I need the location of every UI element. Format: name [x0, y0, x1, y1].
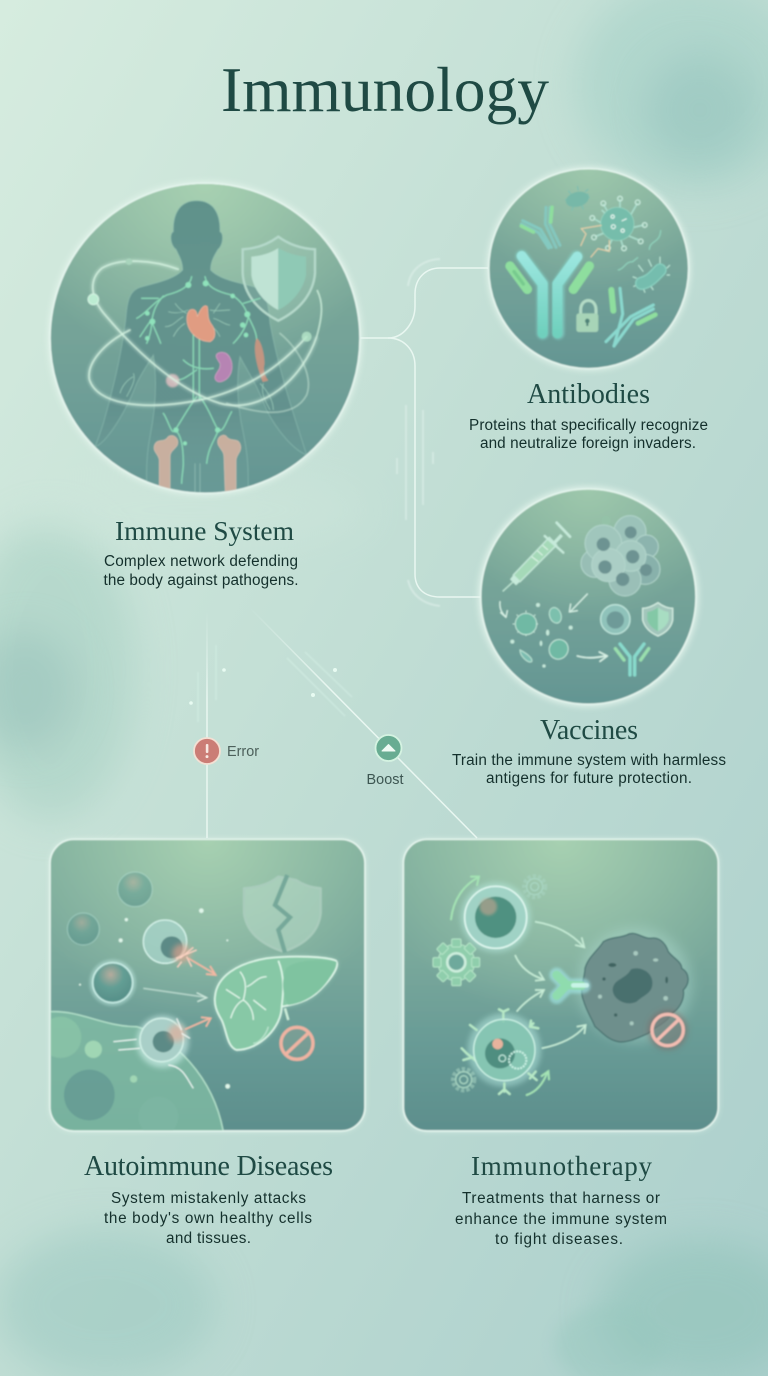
icon: dendritic cell [462, 1009, 541, 1094]
badge: error: Error [227, 744, 259, 760]
icon: immune cell [601, 605, 630, 634]
icon: small shield [643, 603, 673, 636]
badge: error [194, 738, 259, 764]
icon: gear small bottom [453, 1069, 474, 1090]
icon: large antibody [510, 256, 589, 333]
heading and text: immune system [104, 515, 298, 589]
icon: cell cluster [581, 516, 660, 596]
icon: shield [243, 237, 315, 321]
arrow: cell to receptor [515, 955, 544, 981]
icon: gear small top [524, 876, 545, 897]
heading and text: immunotherapy: to fight diseases. [495, 1231, 623, 1248]
heading and text: immunotherapy [455, 1151, 667, 1248]
icon: attacking cell lower [113, 1016, 193, 1088]
panel: immune system illustration [48, 181, 362, 496]
icon: small antibody [615, 644, 649, 675]
badge: boost: Boost [366, 772, 404, 788]
panel: antibodies illustration [486, 166, 691, 371]
arrow: dendritic to target [542, 1025, 586, 1048]
icon: T cell [461, 882, 531, 952]
heading and text: autoimmune diseases: and tissues. [166, 1230, 251, 1247]
heading and text: antibodies: Proteins that specifically recognize [469, 417, 708, 434]
heading and text: autoimmune diseases [84, 1151, 333, 1247]
arrow: growth arc [451, 877, 479, 919]
icon: heart [187, 306, 215, 342]
icon: femur left [154, 436, 178, 495]
heading and text: immunotherapy: Treatments that harness or [462, 1190, 660, 1207]
icon: kidney [215, 352, 232, 382]
icon: squiggles [618, 231, 661, 270]
arrow: attack lower [185, 1017, 211, 1029]
panel: autoimmune diseases illustration [40, 839, 365, 1137]
icon: prohibition sign [281, 1027, 313, 1059]
icon: spleen glow [166, 374, 179, 387]
icon: small antibody upper [521, 207, 560, 248]
heading and text: vaccines [452, 715, 726, 787]
icon: arrows [500, 594, 607, 661]
icon: attacking cell upper [143, 920, 197, 967]
heading and text: immune system: Complex network defending [104, 553, 298, 570]
icon: arm muscle [255, 338, 268, 382]
icon: liver [215, 957, 337, 1050]
icon: small antibody lower [606, 288, 655, 346]
icon: receptor [557, 975, 587, 997]
icon: prohibition sign [648, 1010, 688, 1050]
panel: vaccines illustration [478, 486, 699, 707]
arrow: growth small [527, 1071, 549, 1095]
icon: germs [510, 603, 573, 668]
heading and text: autoimmune diseases: Autoimmune Diseases [84, 1151, 333, 1182]
icon: syringe [503, 523, 570, 591]
icon: bacterium [633, 257, 670, 293]
arrow: cell to target [535, 922, 584, 947]
heading and text: immunotherapy: Immunotherapy [471, 1151, 652, 1181]
icon: virus [590, 196, 647, 251]
heading and text: antibodies: and neutralize foreign invaders. [480, 435, 696, 452]
icon: body silhouette [95, 201, 307, 495]
panel: immunotherapy illustration [403, 839, 718, 1131]
icon: tissue [40, 1012, 223, 1137]
heading and text: immune system: the body against pathogens. [104, 572, 298, 589]
heading and text: vaccines: Vaccines [540, 715, 638, 746]
orbit rings [89, 261, 321, 412]
heading and text: vaccines: Train the immune system with harmless [452, 752, 726, 769]
icon: tumor cell [578, 928, 692, 1042]
badge: boost [366, 735, 404, 788]
icon: background cells [67, 872, 152, 1006]
title: Immunology [221, 54, 549, 125]
icon: gear large [433, 939, 480, 986]
connector: error line [189, 612, 226, 838]
heading and text: immune system: Immune System [115, 515, 294, 546]
heading and text: autoimmune diseases: System mistakenly attacks [111, 1190, 306, 1207]
connector: boost line [250, 608, 477, 838]
heading and text: antibodies [469, 379, 708, 452]
icon: broken shield [244, 875, 321, 953]
icon: padlock [576, 300, 598, 332]
connector: immune system to antibodies and vaccines [360, 259, 488, 606]
arrow: attack neutral [143, 988, 207, 1002]
icon: lightning link [581, 225, 609, 257]
heading and text: antibodies: Antibodies [527, 379, 650, 410]
icon: spiky small germ [564, 186, 590, 211]
heading and text: immunotherapy: enhance the immune system [455, 1211, 667, 1228]
heading and text: vaccines: antigens for future protection. [486, 770, 692, 787]
icon: lymphatic network [137, 277, 260, 483]
arrow: attack upper [188, 958, 216, 975]
arrow: dendritic to receptor [517, 990, 544, 1012]
icon: femur right [218, 435, 241, 495]
heading and text: autoimmune diseases: the body's own healthy cells [104, 1210, 312, 1227]
